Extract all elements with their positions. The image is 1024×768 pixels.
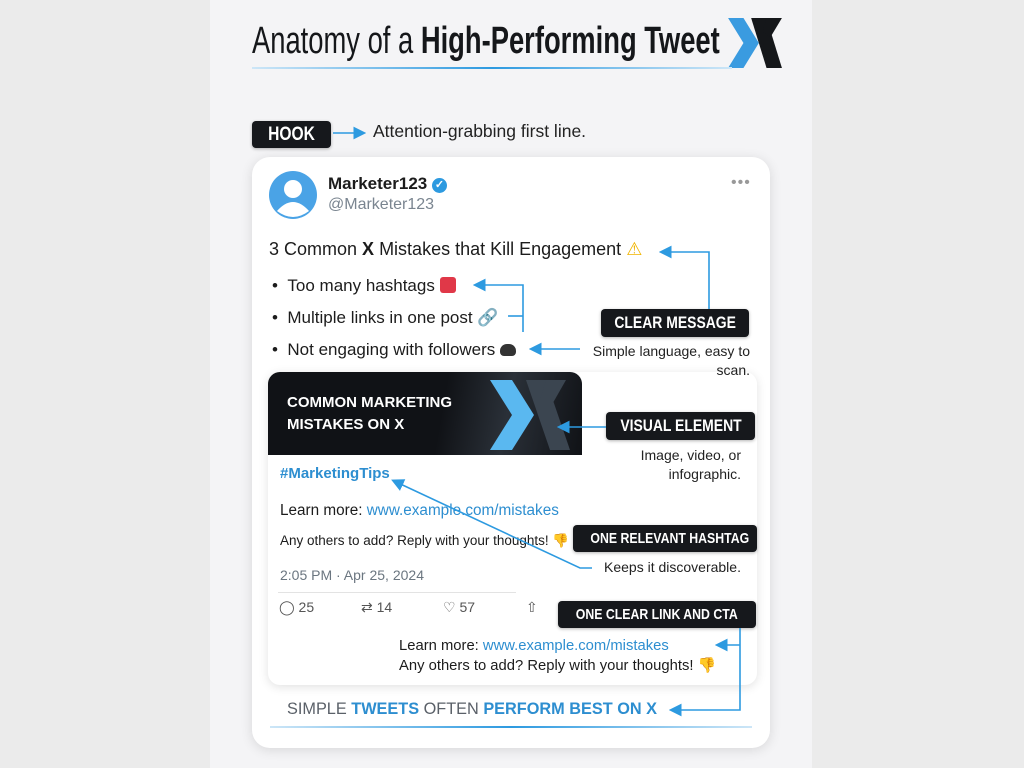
hashtag label: ONE RELEVANT HASHTAG bbox=[590, 530, 749, 547]
background panel bbox=[210, 0, 812, 768]
action bar: ♡ 57 bbox=[443, 599, 475, 615]
visual element image: COMMON MARKETING bbox=[287, 394, 452, 411]
link cta label bbox=[558, 601, 756, 628]
clear message text: Simple language, easy to bbox=[593, 343, 750, 359]
bullet list bbox=[272, 276, 516, 359]
hook text: Attention-grabbing first line. bbox=[373, 121, 586, 141]
link cta label: ONE CLEAR LINK AND CTA bbox=[576, 606, 738, 623]
cta line: Any others to add? Reply with your thoughts! 👎 bbox=[280, 533, 569, 548]
hook label: HOOK bbox=[268, 124, 315, 145]
icon: X logo bbox=[728, 18, 782, 68]
visual element text: Image, video, or bbox=[641, 447, 741, 463]
headline: 3 Common X Mistakes that Kill Engagement ⚠ bbox=[269, 239, 642, 259]
clear message label: CLEAR MESSAGE bbox=[614, 313, 736, 332]
link cta example: Learn more: www.example.com/mistakes bbox=[399, 638, 669, 654]
visual element image bbox=[268, 372, 582, 455]
avatar bbox=[269, 171, 317, 219]
menu dots: ••• bbox=[731, 174, 751, 191]
hashtag: #MarketingTips bbox=[280, 465, 390, 482]
link cta example: Any others to add? Reply with your thoughts! 👎 bbox=[399, 658, 716, 674]
hashtag label bbox=[573, 525, 757, 552]
hook label bbox=[252, 121, 331, 148]
bottom tagline: SIMPLE TWEETS OFTEN PERFORM BEST ON X bbox=[287, 700, 657, 718]
link line: Learn more: www.example.com/mistakes bbox=[280, 502, 559, 519]
clear message text bbox=[593, 343, 750, 378]
name: ✓ bbox=[435, 179, 444, 191]
action bar: ⇧ bbox=[526, 599, 538, 615]
action bar: ⇄ 14 bbox=[361, 599, 392, 615]
link cta example bbox=[399, 638, 716, 674]
action bar: ◯ 25 bbox=[279, 599, 314, 615]
visual element image: MISTAKES ON X bbox=[287, 416, 404, 433]
bullet list: • Too many hashtags bbox=[272, 276, 435, 295]
clear message label bbox=[601, 309, 749, 337]
clear message text: scan. bbox=[717, 362, 750, 378]
timestamp: 2:05 PM · Apr 25, 2024 bbox=[280, 567, 424, 583]
hashtag text: Keeps it discoverable. bbox=[604, 559, 741, 575]
action bar bbox=[279, 599, 538, 616]
bullet list: • Multiple links in one post 🔗 bbox=[272, 308, 498, 327]
bullet list: • Not engaging with followers bbox=[272, 340, 495, 359]
visual element label bbox=[606, 412, 755, 440]
name: Marketer123 bbox=[328, 174, 427, 193]
main card bbox=[252, 157, 770, 748]
title: Anatomy of a High-Performing Tweet bbox=[252, 20, 720, 62]
handle: @Marketer123 bbox=[328, 196, 434, 213]
inner tweet card bbox=[268, 372, 757, 685]
visual element text: infographic. bbox=[669, 466, 741, 482]
visual element text bbox=[641, 447, 741, 482]
visual element label: VISUAL ELEMENT bbox=[620, 416, 741, 435]
